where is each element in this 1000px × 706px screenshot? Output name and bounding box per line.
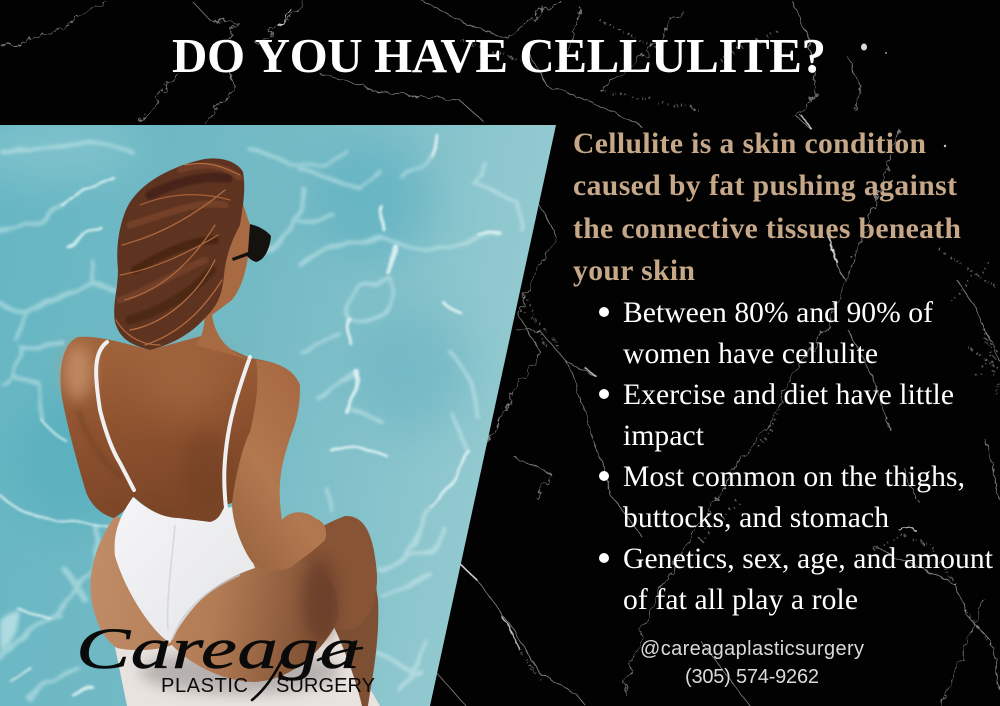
contact details: @careagaplasticsurgery xyxy=(640,638,864,660)
bullet: factors: of fat all play a role xyxy=(623,584,858,616)
logo script wordmark: Careaga xyxy=(76,617,360,681)
intro paragraph: your skin xyxy=(573,255,696,287)
white swimsuit xyxy=(115,497,255,643)
swimsuit straps xyxy=(96,342,250,508)
bent thigh and knee xyxy=(300,516,378,630)
intro paragraph xyxy=(573,128,962,287)
bullet: common areas xyxy=(599,461,965,534)
neck and face xyxy=(195,195,250,360)
intro paragraph: Cellulite is a skin condition xyxy=(573,128,927,160)
bullet: exercise and diet xyxy=(599,379,954,452)
title: DO YOU HAVE CELLULITE? xyxy=(172,28,826,83)
back and left arm xyxy=(61,335,300,522)
intro paragraph: the connective tissues beneath xyxy=(573,213,962,245)
intro paragraph: caused by fat pushing against xyxy=(573,170,957,202)
far leg xyxy=(334,588,378,706)
hair xyxy=(114,158,244,350)
white seat ledge xyxy=(115,625,380,706)
woman figure xyxy=(61,158,378,706)
shadow on the seat xyxy=(140,650,340,694)
logo: Careaga Plastic Surgery xyxy=(76,617,375,700)
logo subtitle: SURGERY xyxy=(276,675,375,697)
logo subtitle xyxy=(161,675,375,697)
bullet list xyxy=(599,297,994,616)
sunglasses xyxy=(232,224,271,262)
bullet: exercise and diet: Exercise and diet have little xyxy=(623,379,954,411)
bullet: factors xyxy=(599,543,994,616)
hips xyxy=(90,516,338,682)
bullet: exercise and diet: impact xyxy=(623,420,705,452)
bullet: prevalence: women have cellulite xyxy=(623,338,878,370)
right arm and hand xyxy=(232,360,326,570)
bullet: prevalence: Between 80% and 90% of xyxy=(623,297,933,329)
photo: woman sitting by a pool xyxy=(0,120,560,706)
bullet: common areas: buttocks, and stomach xyxy=(623,502,889,534)
logo subtitle: PLASTIC xyxy=(161,675,248,697)
pool water xyxy=(0,120,560,706)
contact details: (305) 574-9262 xyxy=(685,666,819,688)
bullet: factors: Genetics, sex, age, and amount xyxy=(623,543,994,575)
contact details xyxy=(640,638,864,688)
bullet: prevalence xyxy=(599,297,933,370)
bullet: common areas: Most common on the thighs, xyxy=(623,461,965,493)
logo swash xyxy=(252,648,362,700)
